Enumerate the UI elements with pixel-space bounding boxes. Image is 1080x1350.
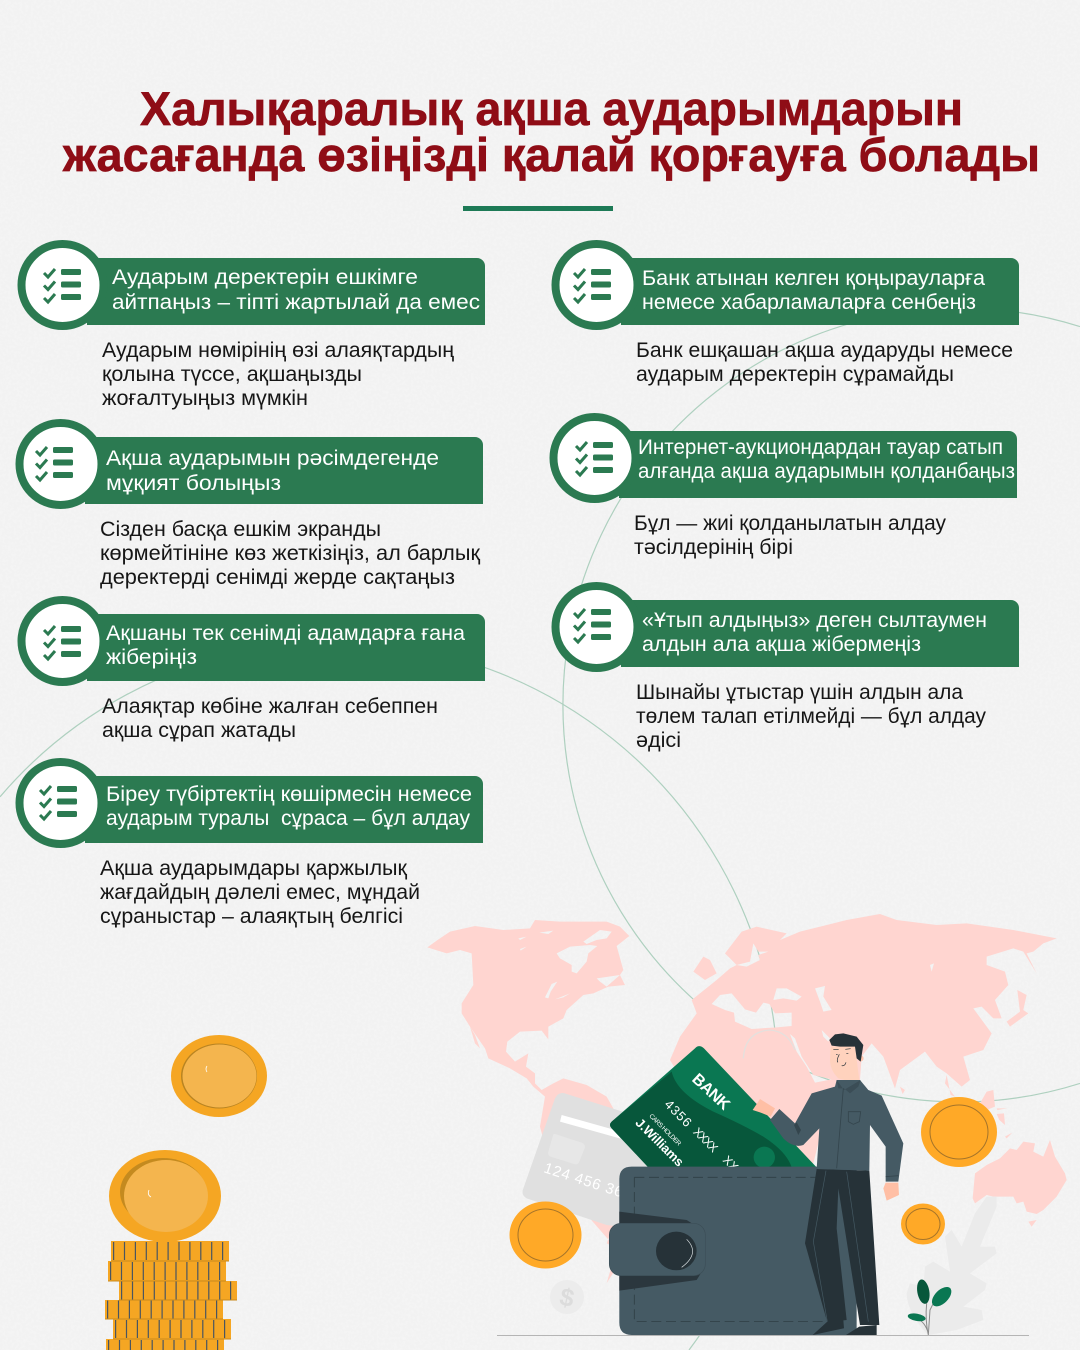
body text: аударым деректерін сұрамайды — [636, 363, 954, 386]
heading bar — [621, 258, 1019, 325]
heading bar — [87, 614, 485, 681]
plant leaves — [907, 1278, 955, 1335]
body text — [634, 512, 946, 559]
falling coin, lower — [109, 1150, 221, 1242]
heading text — [642, 267, 985, 314]
title: жасағанда өзіңізді қалай қорғауға болады — [62, 128, 1040, 181]
item 3 — [22, 600, 485, 742]
body text: Ақша аударымдары қаржылық — [100, 857, 408, 880]
body text — [102, 339, 454, 410]
map: islands of Europe and Japan — [693, 957, 1028, 1097]
heading text — [106, 447, 439, 495]
man: trousers — [805, 1169, 879, 1325]
icon: checklist — [22, 600, 104, 682]
heading text: айтпаңыз – тіпті жартылай да емес — [112, 291, 480, 314]
body text — [100, 518, 481, 589]
body text: деректерді сенімді жерде сақтаңыз — [100, 566, 455, 589]
heading text — [638, 436, 1015, 483]
green bank card: 4356 — [662, 1097, 695, 1130]
heading text: немесе хабарламаларға сенбеңіз — [642, 291, 976, 314]
dollar coin: $ — [557, 1283, 577, 1313]
coin stack — [105, 1241, 237, 1350]
heading text: алдын ала ақша жібермеңіз — [642, 633, 921, 656]
green bank card: BANK — [688, 1071, 733, 1114]
icon: checklist — [20, 762, 102, 844]
green bank card: J.Williams — [633, 1115, 687, 1169]
body text: Сізден басқа ешкім экранды — [100, 518, 381, 541]
item 4 — [20, 762, 483, 928]
heading text — [106, 622, 465, 669]
icon: checklist — [556, 244, 638, 326]
man: hands — [753, 1099, 899, 1201]
body text — [102, 695, 438, 742]
body text — [636, 681, 986, 752]
wallet — [609, 1167, 857, 1335]
heading bar — [87, 258, 485, 325]
grey card — [523, 1093, 650, 1227]
heading text: мұқият болыңыз — [106, 472, 281, 495]
icon: checklist — [554, 417, 636, 499]
body text: қолына түссе, ақшаңызды — [102, 363, 362, 386]
body text — [100, 857, 420, 928]
body text: төлем талап етілмейді — бұл алдау — [636, 705, 986, 728]
body text: ақша сұрап жатады — [102, 719, 296, 742]
item 5 — [556, 244, 1019, 386]
heading bar — [621, 600, 1019, 667]
heading bar — [85, 437, 483, 504]
body text — [636, 339, 1013, 386]
green bank card — [610, 1046, 817, 1174]
body text: Банк ешқашан ақша аударуды немесе — [636, 339, 1013, 362]
body text: әдісі — [636, 729, 681, 752]
body text: Шынайы ұтыстар үшін алдын ала — [636, 681, 963, 704]
heading text: аударым туралы сұраса – бұл алдау — [106, 807, 470, 830]
green bank card: CARS HOLDER — [648, 1113, 682, 1148]
title — [62, 82, 1040, 181]
ground line — [497, 1335, 1029, 1336]
man: shoes — [813, 1320, 877, 1335]
grey card: 124 456 36 — [542, 1160, 625, 1201]
green bank card: XX — [720, 1153, 741, 1174]
heading text: Ақша аударымын рәсімдегенде — [106, 447, 439, 470]
green bank card: XXXX — [690, 1125, 721, 1155]
map: Americas — [427, 920, 633, 1283]
body text: сұраныстар – алаяқтың белгісі — [100, 905, 403, 928]
coin, right large — [921, 1097, 997, 1167]
pale plant — [907, 1197, 997, 1335]
man: shirt — [770, 1080, 903, 1182]
man — [753, 1033, 903, 1335]
heading text: алғанда ақша аударымын қолданбаңыз — [638, 460, 1015, 483]
heading text: жіберіңіз — [106, 646, 197, 669]
title underline — [463, 206, 613, 211]
heading text: Ақшаны тек сенімді адамдарға ғана — [106, 622, 465, 645]
icon: checklist — [556, 586, 638, 668]
heading text: Интернет-аукциондардан тауар сатып — [638, 436, 1003, 459]
body text: жағдайдың дәлелі емес, мұндай — [100, 881, 420, 904]
item 6 — [554, 417, 1017, 559]
heading text — [642, 609, 987, 656]
coin, left — [510, 1202, 582, 1268]
item 2 — [20, 423, 483, 589]
body text: Алаяқтар көбіне жалған себеппен — [102, 695, 438, 718]
body text: тәсілдерінің бірі — [634, 536, 793, 559]
item 1 — [22, 244, 485, 410]
body text: Аударым нөмірінің өзі алаяқтардың — [102, 339, 454, 362]
heading text: Банк атынан келген қоңырауларға — [642, 267, 985, 290]
heading text: Біреу түбіртектің көшірмесін немесе — [106, 783, 472, 806]
title: Халықаралық ақша аударымдарын — [140, 82, 963, 135]
falling coin, upper — [171, 1035, 267, 1117]
heading text: Аударым деректерін ешкімге — [112, 266, 418, 289]
map: Eurasia and Africa — [670, 914, 1057, 1210]
body text: жоғалтуыңыз мүмкін — [102, 387, 308, 410]
coin, small — [901, 1204, 945, 1244]
man: head — [830, 1047, 859, 1081]
heading text: «Ұтып алдыңыз» деген сылтаумен — [642, 609, 987, 632]
world map — [427, 914, 1067, 1283]
dollar coin — [550, 1280, 584, 1314]
heading text — [106, 783, 472, 830]
heading bar — [85, 776, 483, 843]
body text: Бұл — жиі қолданылатын алдау — [634, 512, 946, 535]
item 7 — [556, 586, 1019, 752]
decorative arcs — [0, 308, 1080, 1350]
pale arc over map — [743, 1030, 795, 1058]
heading text — [112, 266, 480, 314]
icon: checklist — [20, 423, 102, 505]
icon: checklist — [22, 244, 104, 326]
heading bar — [619, 431, 1017, 498]
body text: көрмейтініне көз жеткізіңіз, ал барлық — [100, 542, 481, 565]
map: Australia and Indonesia — [973, 1090, 1067, 1227]
